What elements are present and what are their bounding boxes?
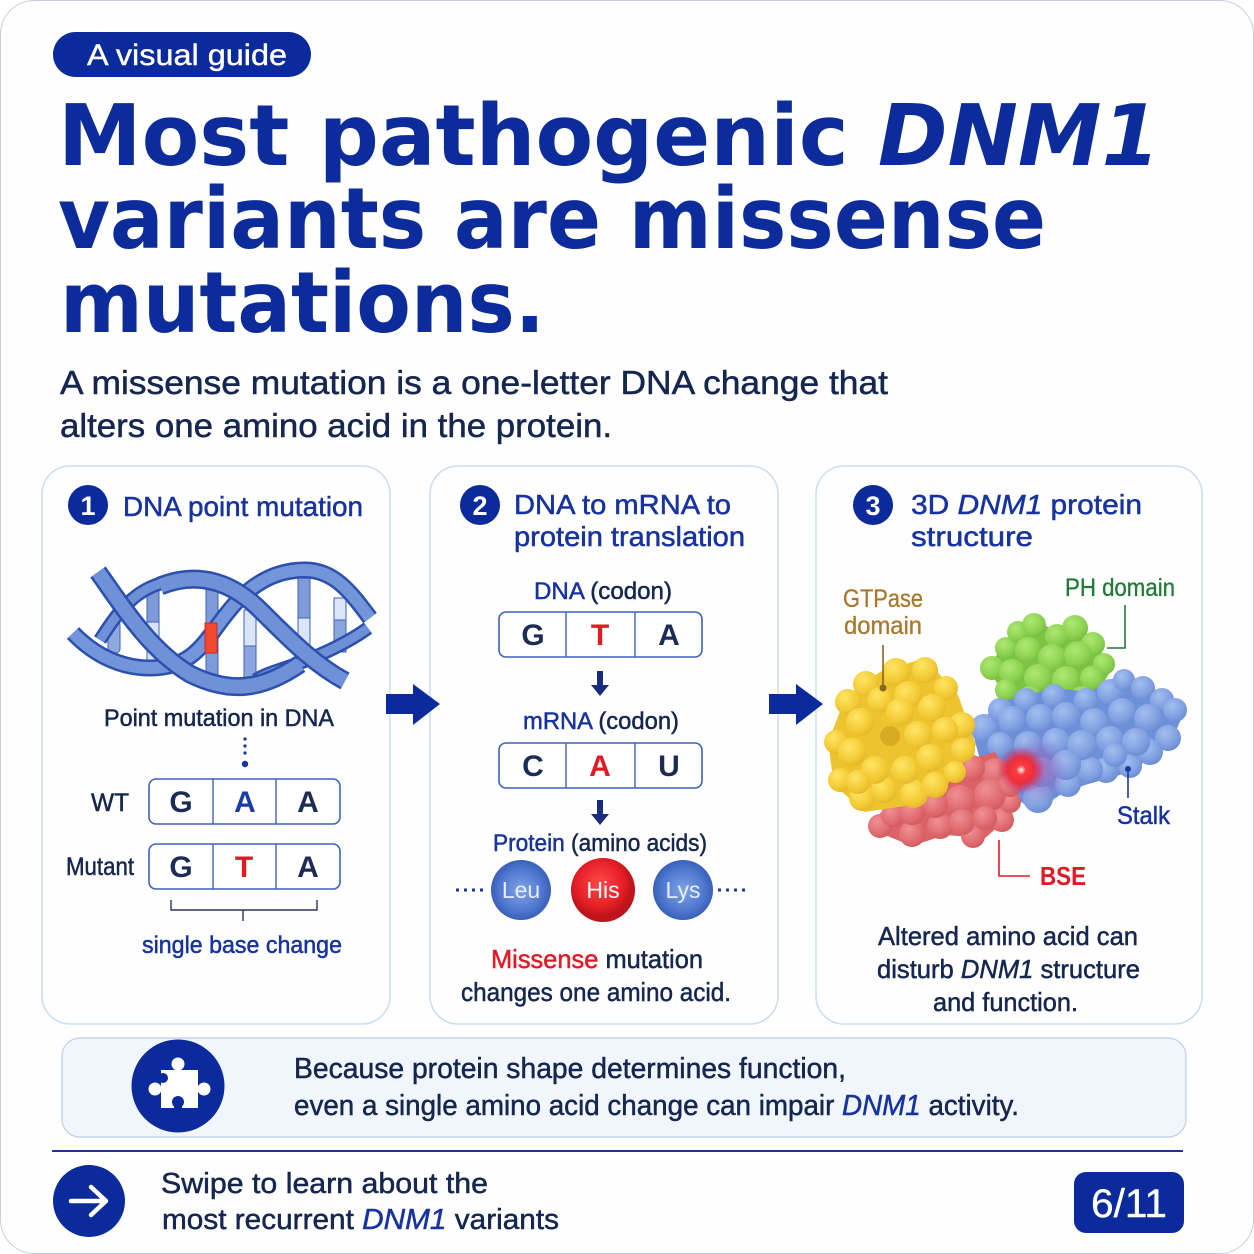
DNA double helix illustration <box>73 570 370 687</box>
panel 2 heading <box>460 485 745 552</box>
subtitle <box>60 364 888 444</box>
DNA codon boxes: T <box>591 619 609 652</box>
missense caption: changes one amino acid. <box>461 977 731 1007</box>
panel 3: 3D DNM1 protein structure <box>816 466 1202 1024</box>
panel 3 caption: and function. <box>933 987 1078 1017</box>
callout text <box>294 1053 1019 1122</box>
PH domain (green) <box>980 613 1115 713</box>
panel 3 caption: Altered amino acid can <box>878 921 1138 951</box>
panel 1 heading: DNA point mutation <box>123 491 363 522</box>
panel 3 caption: disturb DNM1 structure <box>877 954 1140 984</box>
panel 2 heading: DNA to mRNA to <box>514 489 731 520</box>
title: variants are missense <box>58 170 1046 269</box>
BSE domain (red) <box>868 752 1022 848</box>
panel 3 caption <box>877 921 1140 1017</box>
DNA codon label: DNA (codon) <box>534 578 672 605</box>
mutant sequence row: T <box>235 851 253 884</box>
missense caption <box>461 944 731 1007</box>
panel 3 heading <box>853 485 1142 552</box>
panel 1: DNA point mutation <box>42 466 390 1024</box>
footer: swipe prompt <box>53 1165 559 1237</box>
single base change label: single base change <box>142 932 342 959</box>
swipe text: most recurrent DNM1 variants <box>162 1204 559 1236</box>
protein label: Protein (amino acids) <box>493 830 707 857</box>
mutation glow <box>997 736 1070 804</box>
panel 3 heading: 3D DNM1 protein <box>911 489 1142 520</box>
panel 1 heading <box>68 485 363 525</box>
arrow: panel 2 to 3 <box>769 684 823 725</box>
WT sequence row <box>91 779 340 824</box>
callout text: Because protein shape determines function, <box>294 1053 846 1085</box>
label: BSE <box>999 840 1086 891</box>
3D protein surface model <box>824 613 1187 848</box>
WT sequence row: A <box>297 786 319 819</box>
panel 3 heading: structure <box>911 521 1033 552</box>
mRNA codon boxes: A <box>589 750 611 783</box>
label: Stalk: Stalk <box>1117 802 1170 830</box>
callout text: even a single amino acid change can impair DNM1 activity. <box>294 1090 1019 1122</box>
label: GTPase domain: domain <box>844 612 922 640</box>
mutant sequence row: G <box>169 851 193 884</box>
callout: protein shape determines function <box>62 1038 1186 1137</box>
title: Most pathogenic DNM1 <box>58 87 1160 186</box>
page number badge: 6/11 <box>1091 1182 1167 1226</box>
tag pill: A visual guide: A visual guide <box>87 39 287 72</box>
mutant sequence row: A <box>297 851 319 884</box>
panel 2 heading: protein translation <box>514 521 745 552</box>
label: Stalk <box>1117 766 1170 830</box>
mRNA codon boxes <box>499 743 702 788</box>
missense caption: Missense mutation <box>491 944 703 974</box>
page number badge <box>1074 1172 1184 1233</box>
stalk domain (blue) <box>970 669 1187 813</box>
GTPase domain (yellow) <box>824 657 976 812</box>
amino acid chain: His <box>586 877 620 903</box>
WT sequence row: G <box>169 786 193 819</box>
mRNA codon boxes: C <box>522 750 544 783</box>
label: GTPase domain <box>843 585 923 692</box>
amino acid chain: Leu <box>502 877 540 903</box>
icon: arrow circle <box>53 1165 125 1237</box>
subtitle: alters one amino acid in the protein. <box>60 407 612 444</box>
WT sequence row: A <box>234 786 256 819</box>
swipe text <box>161 1168 559 1236</box>
mutated base highlight <box>205 623 217 653</box>
panel 2: DNA to mRNA to protein <box>430 466 778 1024</box>
label: PH domain <box>1065 574 1175 648</box>
mutant sequence row <box>66 844 340 889</box>
DNA codon boxes <box>499 612 702 657</box>
DNA codon boxes: A <box>658 619 680 652</box>
amino acid chain <box>456 858 748 922</box>
mRNA codon boxes: U <box>658 750 680 783</box>
caption: point mutation in DNA: Point mutation in DNA <box>104 705 334 732</box>
mRNA codon label: mRNA (codon) <box>523 708 679 735</box>
bracket <box>171 900 317 921</box>
title: mutations. <box>60 254 545 353</box>
label: PH domain: PH domain <box>1065 574 1175 602</box>
arrow: panel 1 to 2 <box>386 684 440 725</box>
label: BSE: BSE <box>1040 861 1086 891</box>
panel 1 heading: 1 <box>80 491 96 521</box>
dotted leader <box>242 737 248 767</box>
subtitle: A missense mutation is a one-letter DNA change that <box>60 364 888 401</box>
title <box>58 87 1160 353</box>
down arrow <box>591 671 609 696</box>
label: GTPase domain: GTPase <box>843 585 923 613</box>
mutant sequence row: Mutant <box>66 853 134 881</box>
down arrow <box>591 800 609 825</box>
panel 3 heading: 3 <box>865 491 881 521</box>
tag pill: A visual guide <box>53 32 311 77</box>
DNA codon boxes: G <box>521 619 545 652</box>
icon: puzzle piece <box>132 1040 224 1132</box>
panel 2 heading: 2 <box>472 491 488 521</box>
swipe text: Swipe to learn about the <box>161 1168 488 1200</box>
WT sequence row: WT <box>91 789 129 817</box>
amino acid chain: Lys <box>666 877 700 903</box>
